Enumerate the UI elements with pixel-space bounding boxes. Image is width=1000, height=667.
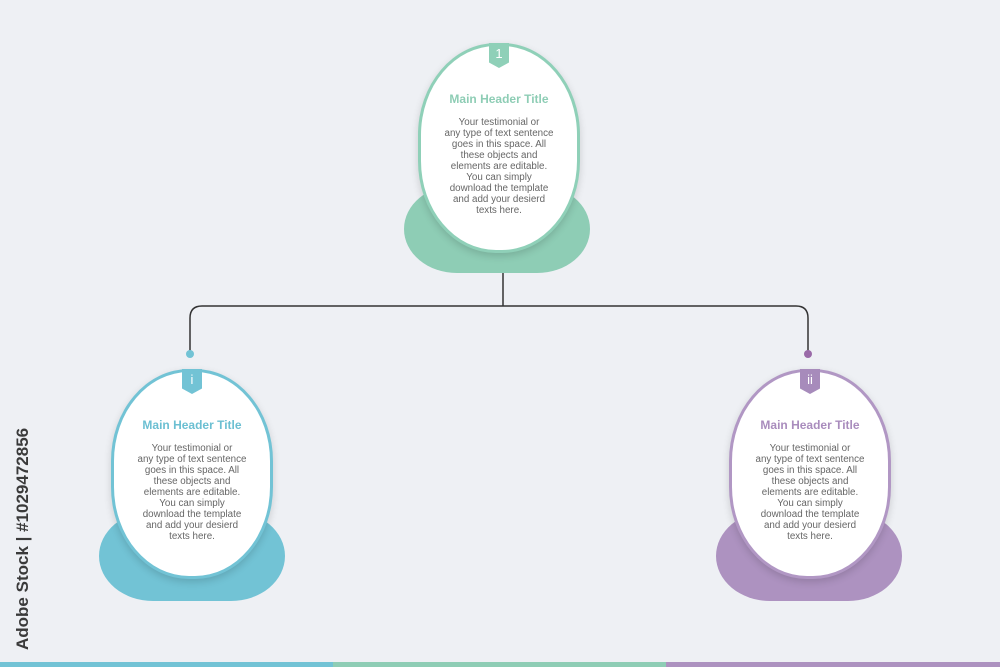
card 1: and add your desierd — [453, 194, 545, 205]
card 1: 1 — [495, 46, 503, 61]
bottom color strip — [0, 662, 1000, 667]
card 1: Main Header Title — [449, 92, 549, 106]
card i — [111, 369, 273, 579]
watermark id: Adobe Stock | #1029472856 — [13, 428, 32, 650]
card 1: texts here. — [476, 205, 522, 216]
card 1 — [418, 43, 580, 253]
blob: purple — [716, 511, 902, 601]
card ii: Main Header Title — [760, 418, 860, 432]
card 1: elements are editable. — [451, 161, 547, 172]
node i (left) — [99, 369, 285, 601]
card ii: any type of text sentence — [756, 454, 864, 465]
card i: Your testimonial or — [152, 443, 232, 454]
card i: Main Header Title — [142, 418, 242, 432]
card i: and add your desierd — [146, 520, 238, 531]
card ii: texts here. — [787, 531, 833, 542]
card i: You can simply — [159, 498, 225, 509]
card i: texts here. — [169, 531, 215, 542]
node ii (right) — [716, 369, 902, 601]
card 1: Your testimonial or — [459, 117, 539, 128]
card 1: any type of text sentence — [445, 128, 553, 139]
card 1: download the template — [450, 183, 548, 194]
card 1: goes in this space. All — [452, 139, 546, 150]
card ii: elements are editable. — [762, 487, 858, 498]
card 1: these objects and — [461, 150, 537, 161]
card i: any type of text sentence — [138, 454, 246, 465]
card ii: ii — [807, 372, 813, 387]
card ii: download the template — [761, 509, 859, 520]
card ii — [729, 369, 891, 579]
card i: goes in this space. All — [145, 465, 239, 476]
card i: download the template — [143, 509, 241, 520]
card i: elements are editable. — [144, 487, 240, 498]
card i: i — [191, 372, 193, 387]
blob: green — [404, 185, 590, 273]
node 1 (top) — [404, 43, 590, 273]
card i: these objects and — [154, 476, 230, 487]
card 1: You can simply — [466, 172, 532, 183]
card ii: these objects and — [772, 476, 848, 487]
blob: blue — [99, 511, 285, 601]
card ii: goes in this space. All — [763, 465, 857, 476]
card ii: Your testimonial or — [770, 443, 850, 454]
card ii: You can simply — [777, 498, 843, 509]
card ii: and add your desierd — [764, 520, 856, 531]
